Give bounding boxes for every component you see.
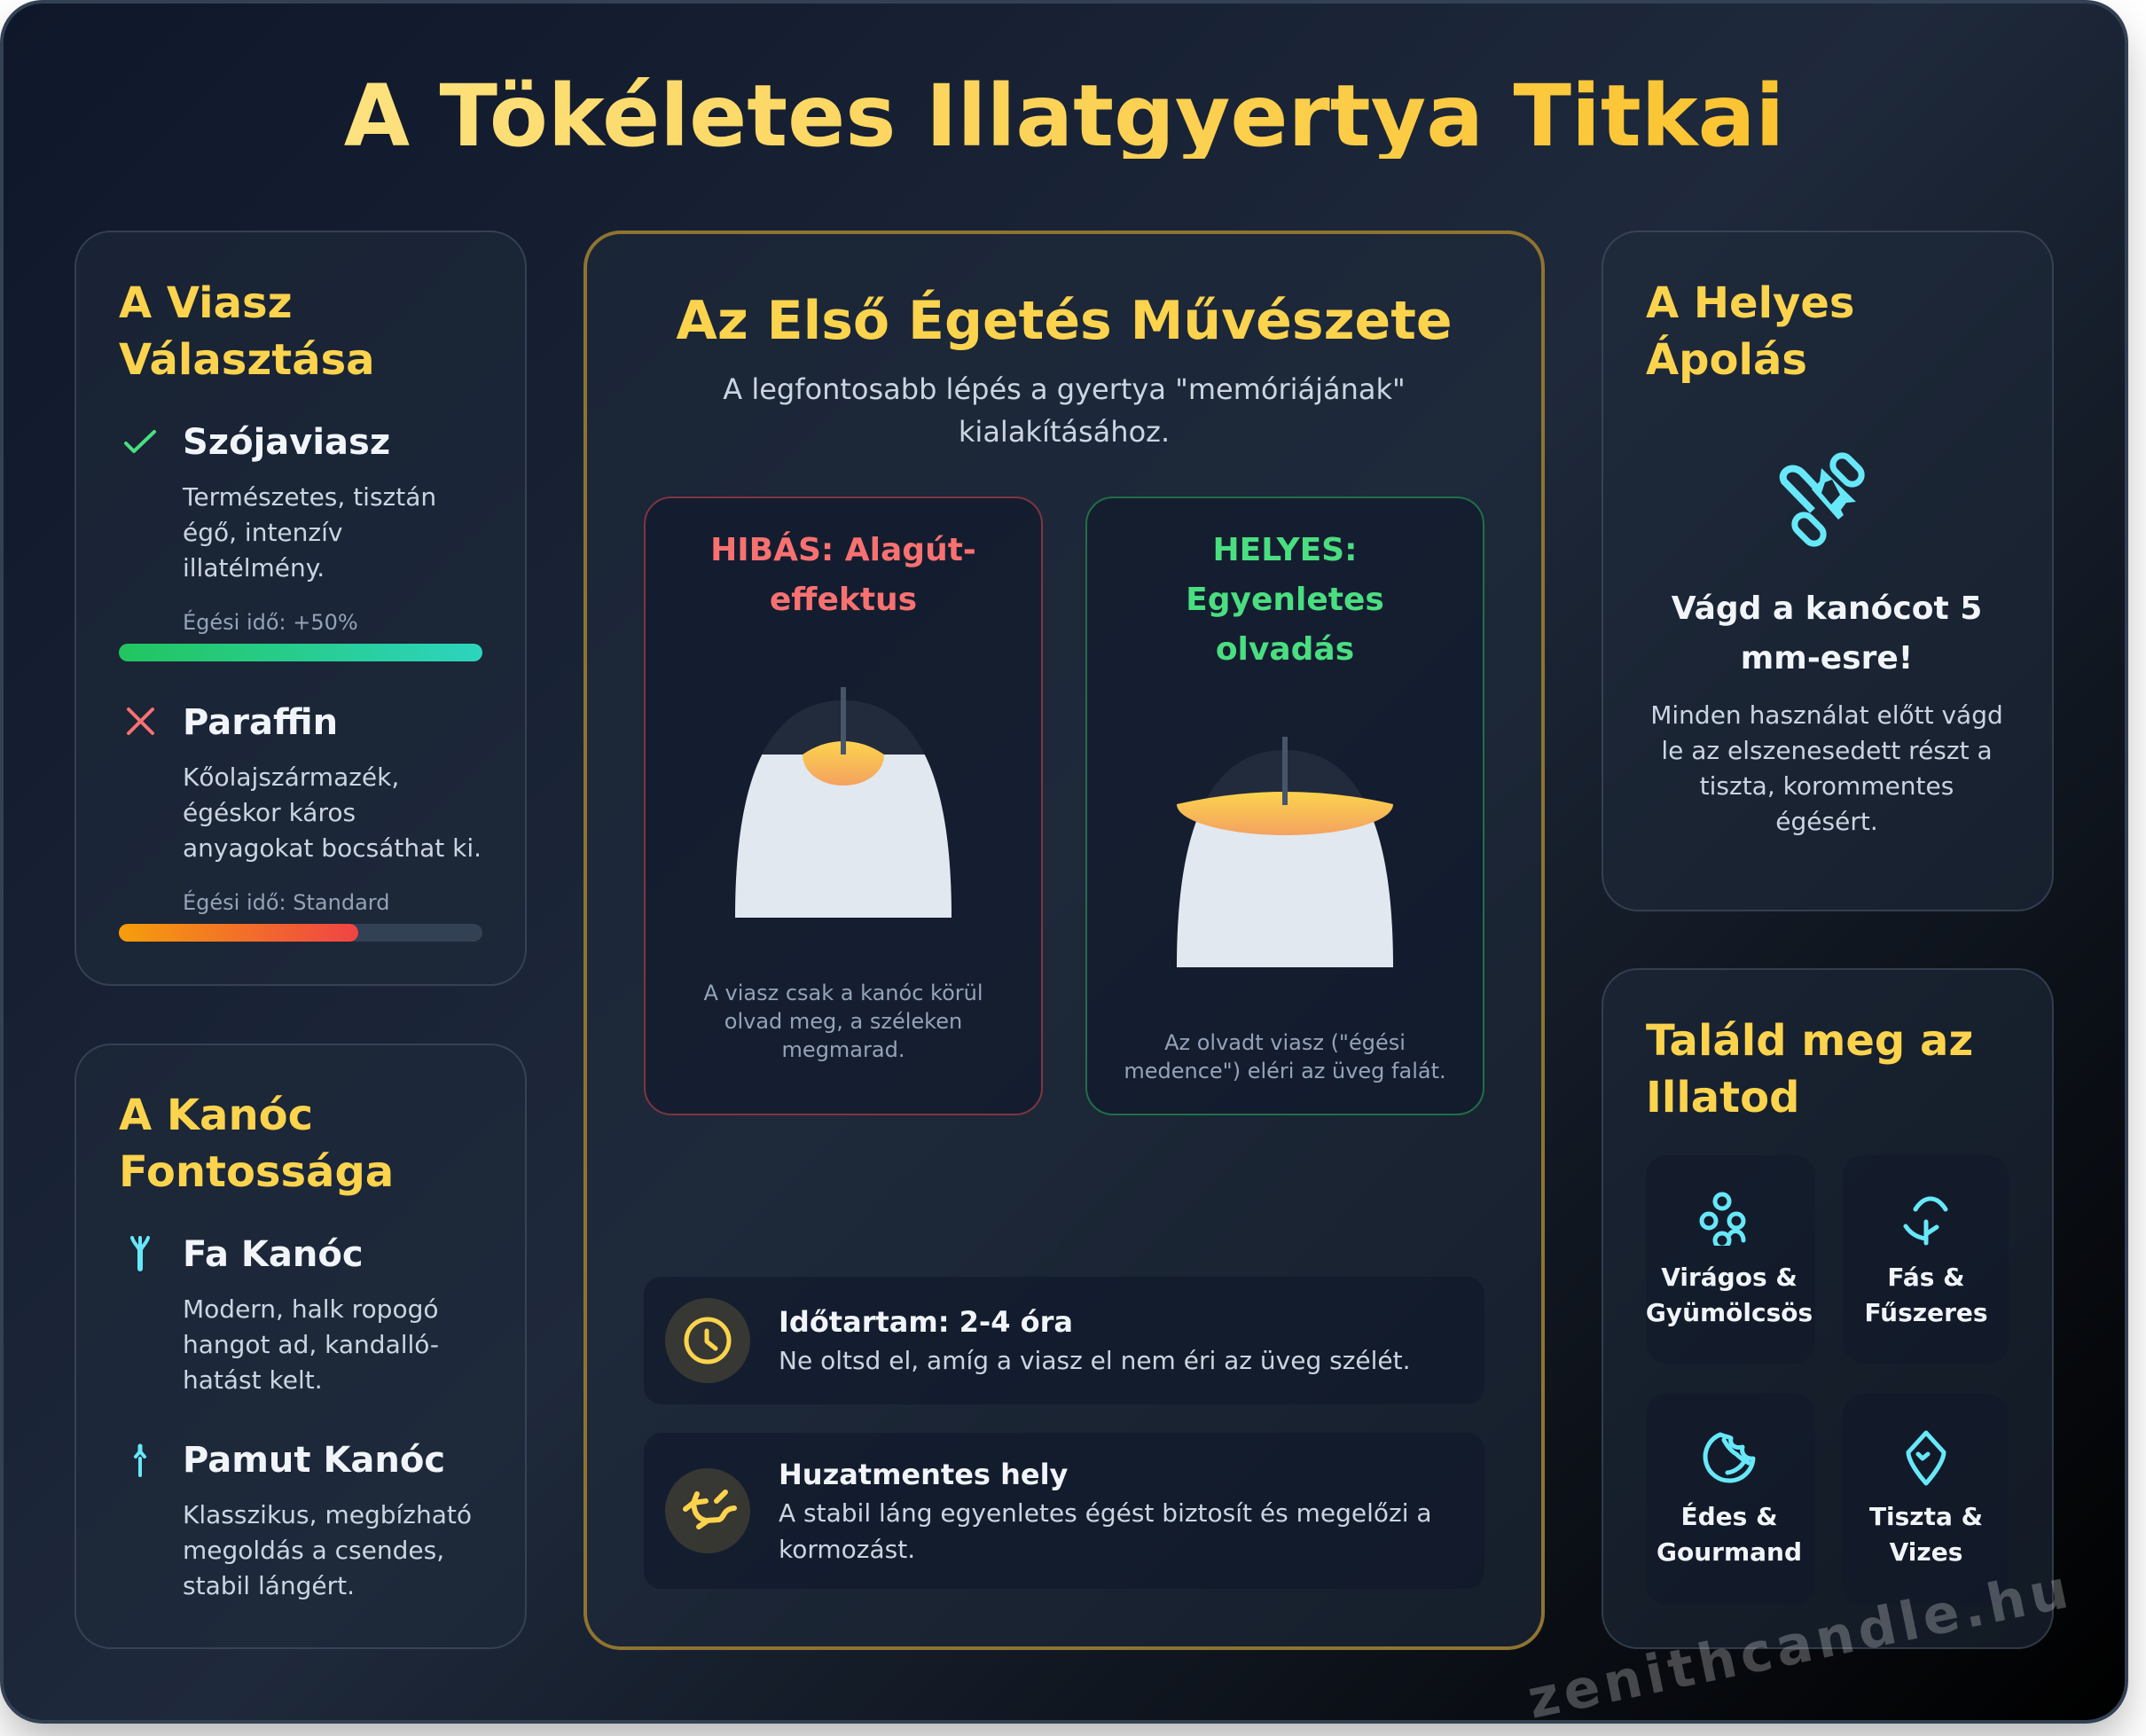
woody label: Fás & xyxy=(1887,1263,1965,1292)
icon: bitten cookie xyxy=(1705,1435,1753,1481)
wood wick description: hatást kelt. xyxy=(183,1365,323,1395)
fresh label: Vizes xyxy=(1890,1537,1962,1567)
care headline: Vágd a kanócot 5 xyxy=(1672,590,1982,627)
heading: proper care: Ápolás xyxy=(1646,334,1807,385)
heading: wick importance: A Kanóc xyxy=(119,1091,313,1140)
icon: wick trimmer scissors xyxy=(1783,451,1866,548)
wood wick description: hangot ad, kandalló- xyxy=(183,1330,439,1359)
panel: wick importance xyxy=(75,1044,526,1648)
duration text: Ne oltsd el, amíg a viasz el nem éri az üveg szélét. xyxy=(779,1346,1411,1375)
soy wax description: Természetes, tisztán xyxy=(182,482,436,512)
panel: wrong burn xyxy=(645,497,1042,1114)
subtitle: A legfontosabb lépés a gyertya "memóriájának" xyxy=(723,372,1406,406)
heading: wax choice: A Viasz xyxy=(119,278,293,328)
sweet label: Gourmand xyxy=(1656,1537,1802,1567)
heading: wax choice: Választása xyxy=(119,335,375,385)
wood wick name: Fa Kanóc xyxy=(183,1234,364,1275)
panel: proper care xyxy=(1602,231,2053,911)
wood wick description: Modern, halk ropogó xyxy=(183,1294,438,1324)
icon: flower xyxy=(1702,1194,1743,1247)
woody label: Fűszeres xyxy=(1864,1298,1988,1327)
cotton wick description: Klasszikus, megbízható xyxy=(183,1500,472,1529)
heading: find your scent: Találd meg az xyxy=(1646,1016,1973,1066)
wrong caption: A viasz csak a kanóc körül xyxy=(704,981,983,1005)
icon: check xyxy=(126,432,154,451)
subtitle: kialakításához. xyxy=(959,415,1170,449)
tile: woody xyxy=(1843,1155,2009,1364)
panel: wax choice xyxy=(75,231,526,985)
wrong caption: olvad meg, a széleken xyxy=(724,1009,962,1034)
soy wax name: Szójaviasz xyxy=(183,422,390,463)
watermark: zenithcandle.hu xyxy=(1523,1558,2078,1732)
care description: le az elszenesedett részt a xyxy=(1661,736,1993,765)
draft title: Huzatmentes hely xyxy=(779,1458,1069,1491)
correct heading: HELYES: xyxy=(1212,532,1358,568)
icon: branch xyxy=(1906,1199,1946,1243)
heading: first burn: Az Első Égetés Művészete xyxy=(676,288,1453,352)
panel: correct burn xyxy=(1086,497,1484,1114)
wrong heading: HIBÁS: Alagút- xyxy=(710,531,976,568)
cotton wick description: megoldás a csendes, xyxy=(183,1536,444,1565)
panel: first burn xyxy=(585,232,1543,1648)
paraffin name: Paraffin xyxy=(183,702,338,743)
icon: wood wick xyxy=(132,1238,148,1269)
tip: draft free xyxy=(644,1433,1484,1589)
icon: gem drop xyxy=(1908,1433,1944,1483)
correct caption: medence") eléri az üveg falát. xyxy=(1124,1059,1446,1083)
cotton wick description: stabil lángért. xyxy=(183,1571,355,1600)
paraffin description: égéskor káros xyxy=(183,798,356,827)
care description: tiszta, korommentes xyxy=(1700,771,1954,801)
wrong heading: effektus xyxy=(770,582,917,618)
care description: égésért. xyxy=(1775,807,1878,836)
draft text: kormozást. xyxy=(779,1535,915,1564)
soy wax description: illatélmény. xyxy=(183,553,325,583)
soy burn time label: Égési idő: +50% xyxy=(183,609,358,635)
paraffin description: anyagokat bocsáthat ki. xyxy=(183,833,482,863)
title: A Tökéletes Illatgyertya Titkai xyxy=(344,66,1784,166)
care headline: mm-esre! xyxy=(1741,640,1913,676)
paraffin burn time label: Égési idő: Standard xyxy=(183,889,389,915)
heading: find your scent: Illatod xyxy=(1646,1073,1799,1122)
icon: draft xyxy=(665,1468,750,1553)
fresh label: Tiszta & xyxy=(1869,1502,1983,1531)
heading: proper care: A Helyes xyxy=(1646,278,1854,328)
tile: sweet xyxy=(1646,1394,1815,1605)
draft text: A stabil láng egyenletes égést biztosít és megelőzi a xyxy=(779,1498,1432,1528)
care description: Minden használat előtt vágd xyxy=(1650,700,2003,730)
correct heading: Egyenletes xyxy=(1186,582,1384,618)
icon: cross xyxy=(129,709,153,733)
illustration: even melt candle xyxy=(1177,737,1393,967)
floral label: Gyümölcsös xyxy=(1646,1298,1813,1327)
floral label: Virágos & xyxy=(1661,1263,1797,1292)
icon: clock xyxy=(665,1298,750,1383)
wrong caption: megmarad. xyxy=(782,1037,905,1062)
sweet label: Édes & xyxy=(1681,1501,1777,1531)
icon: cotton wick xyxy=(136,1446,145,1475)
panel: find your scent xyxy=(1602,969,2053,1648)
soy burn time bar xyxy=(119,644,482,661)
cotton wick name: Pamut Kanóc xyxy=(183,1440,445,1481)
tile: floral xyxy=(1647,1192,1812,1326)
soy wax description: égő, intenzív xyxy=(183,518,342,547)
duration title: Időtartam: 2-4 óra xyxy=(779,1305,1073,1339)
tile: fresh xyxy=(1843,1394,2009,1605)
tip: duration xyxy=(644,1277,1484,1404)
paraffin description: Kőolajszármazék, xyxy=(183,762,399,792)
correct heading: olvadás xyxy=(1216,631,1354,668)
paraffin burn time bar xyxy=(119,924,482,942)
heading: wick importance: Fontossága xyxy=(119,1147,394,1197)
illustration: tunnelling candle xyxy=(735,687,952,918)
correct caption: Az olvadt viasz ("égési xyxy=(1164,1030,1406,1055)
